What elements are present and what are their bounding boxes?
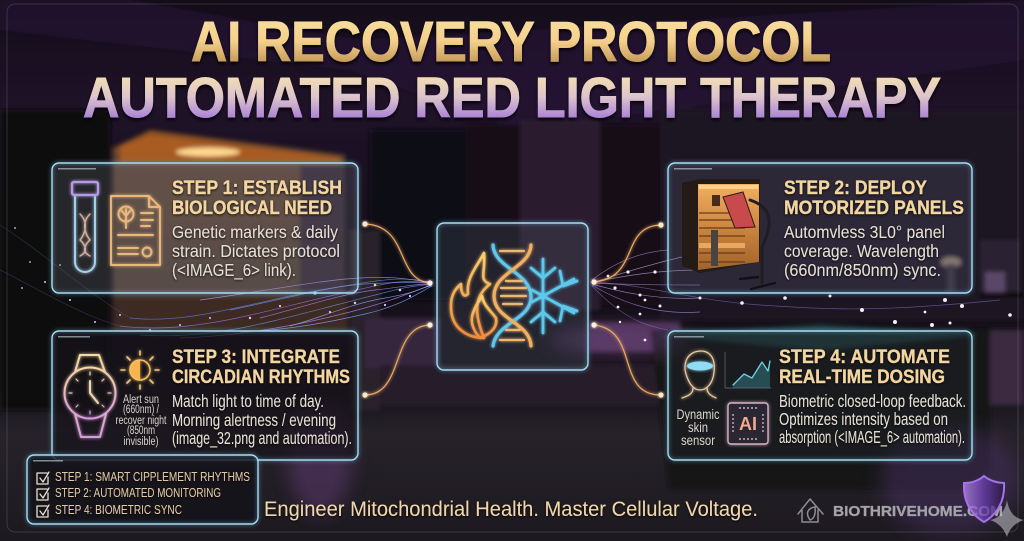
panel: step 3	[52, 331, 358, 460]
icon: head with sensor	[682, 351, 716, 398]
connector: step 2 to hub	[591, 222, 664, 285]
checklist item 2: STEP 2: AUTOMATED MONITORING	[55, 486, 221, 500]
panel: step 1	[52, 163, 358, 293]
heading: step 1: BIOLOGICAL NEED	[172, 197, 332, 219]
title: AUTOMATED RED LIGHT THERAPY	[83, 66, 941, 130]
text: step 1 body	[172, 222, 340, 281]
icon: document with seal	[111, 196, 160, 265]
image: sauna with red light panel	[682, 179, 775, 289]
heading: step 2: MOTORIZED PANELS	[784, 197, 964, 219]
heading: step 2	[784, 177, 964, 219]
icon: flame	[451, 253, 496, 338]
icon: half sun	[121, 351, 159, 389]
text: sun caption: Alert sun	[123, 394, 159, 406]
sauna room behind panel 1	[113, 130, 345, 300]
text: step 2 body: Automvless 3L0° panel	[784, 222, 945, 242]
icon: watch	[64, 355, 116, 437]
panel: step 2	[668, 163, 972, 293]
icon: AI chip: AI	[739, 414, 757, 434]
text: step 3 body: Match light to time of day.	[172, 391, 324, 411]
tagline: Engineer Mitochondrial Health. Master Cellular Voltage.	[264, 497, 758, 521]
title: AI RECOVERY PROTOCOL	[191, 10, 831, 74]
heading: step 4: STEP 4: AUTOMATE	[779, 346, 950, 368]
text: step 2 body: coverage. Wavelength	[784, 241, 939, 261]
logo: BioThriveHome	[798, 499, 1003, 522]
text: step 2 body: (660nm/850nm) sync.	[784, 260, 941, 280]
heading: step 3	[172, 346, 350, 388]
checklist item 1: STEP 1: SMART CIPPLEMENT RHYTHMS	[55, 470, 250, 484]
heading: step 3: CIRCADIAN RHYTHMS	[172, 366, 350, 388]
text: sensor caption: sensor	[681, 433, 715, 448]
text: step 1 body: strain. Dictates protocol	[172, 241, 340, 261]
data wave: right	[592, 250, 1012, 341]
icon: test tube with DNA	[72, 182, 98, 272]
heading: step 1: STEP 1: ESTABLISH	[172, 177, 342, 199]
text: step 1 body: Genetic markers & daily	[172, 222, 338, 242]
title	[83, 10, 941, 130]
heading: step 4: REAL-TIME DOSING	[779, 366, 945, 388]
text: sun caption: invisible)	[124, 436, 159, 448]
text: sensor caption: skin	[688, 420, 708, 435]
connector: step 3 to hub	[362, 322, 433, 398]
text: step 2 body	[784, 222, 945, 280]
text: step 3 body: Morning alertness / evening	[172, 410, 336, 430]
text: sensor caption	[676, 407, 720, 448]
text: step 1 body: (<IMAGE_6> link).	[172, 260, 296, 281]
text: step 4 body	[779, 391, 966, 448]
icon: DNA helix	[493, 245, 531, 346]
coffee machine	[980, 240, 1024, 298]
text: sensor caption: Dynamic	[676, 407, 720, 422]
text: sun caption: recover night	[116, 415, 167, 427]
text: sun caption	[116, 394, 167, 448]
icon: sparkle watermark	[990, 500, 1024, 537]
text: step 4 body: Optimizes intensity based on	[779, 409, 948, 429]
logo: BioThriveHome: BIOTHRIVEHOME.COM	[833, 504, 1003, 520]
panel: central hub	[437, 223, 588, 370]
icon: AI chip	[728, 403, 768, 444]
connector: step 4 to hub	[591, 322, 664, 398]
text: step 3 body: (image_32.png and automation).	[172, 428, 352, 449]
icon: shield	[964, 476, 1004, 522]
icon: snowflake	[531, 259, 577, 333]
heading: step 3: STEP 3: INTEGRATE	[172, 346, 340, 368]
heading: step 2: STEP 2: DEPLOY	[784, 177, 927, 199]
connector: step 1 to hub	[362, 221, 433, 286]
chart: sensor trend	[725, 352, 771, 388]
text: step 3 body	[172, 391, 352, 449]
panel: checklist	[27, 455, 258, 524]
text: sun caption: (660nm) /	[123, 404, 160, 416]
checklist item 3: STEP 4: BIOMETRIC SYNC	[55, 503, 182, 517]
data wave: left	[0, 225, 432, 338]
heading: step 4	[779, 346, 950, 388]
panel: step 4	[668, 331, 972, 460]
heading: step 1	[172, 177, 342, 219]
text: sun caption: (850nm	[127, 425, 155, 437]
text: step 4 body: Biometric closed-loop feedback.	[779, 391, 966, 411]
